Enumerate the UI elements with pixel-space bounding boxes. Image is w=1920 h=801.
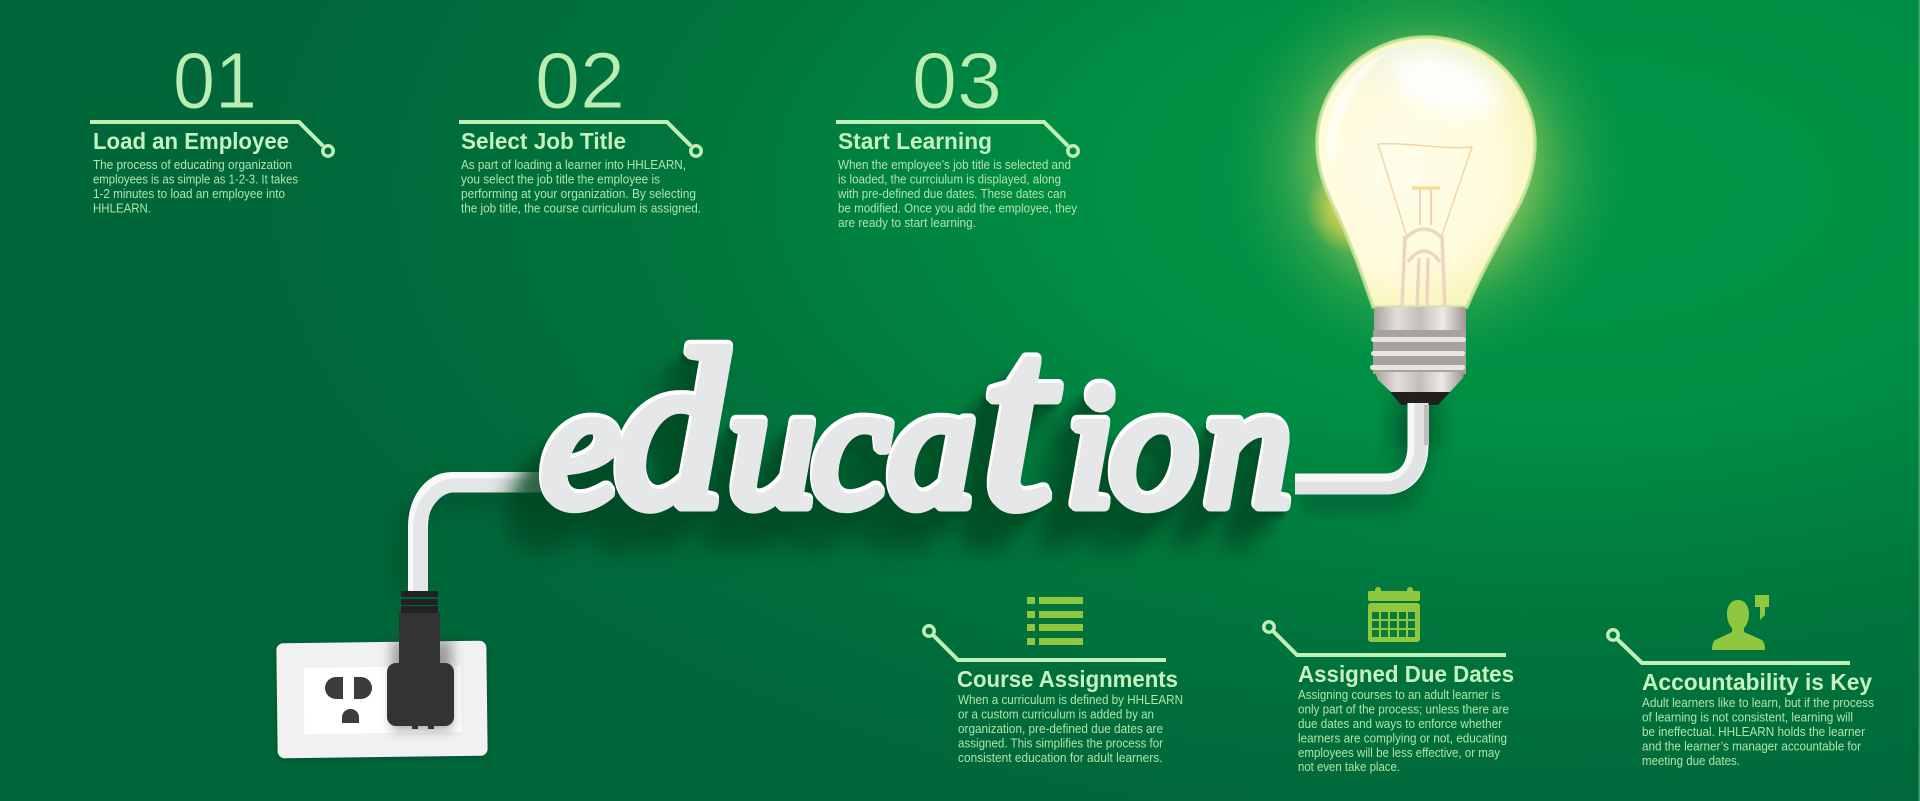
- body text 01: HHLEARN.: [93, 202, 151, 216]
- body text 01: [93, 158, 298, 216]
- number 02: 02: [535, 36, 625, 125]
- body text 02: performing at your organization. By selecting: [461, 187, 696, 201]
- bulb shadow: [1392, 395, 1440, 450]
- icon: list: [1027, 597, 1083, 645]
- heading: select job title: Select Job Title: [461, 128, 626, 154]
- word: education: i: [1066, 347, 1115, 545]
- heading: accountability is key: Accountability is Key: [1642, 669, 1872, 695]
- light bulb: [1221, 0, 1631, 450]
- body text: of learning is not consistent, learning will: [1642, 710, 1853, 724]
- body text: or a custom curriculum is added by an: [958, 708, 1154, 722]
- body text 03: is loaded, the currciulum is displayed, along: [838, 172, 1061, 186]
- word: education: a: [888, 347, 977, 545]
- connector line: [1608, 630, 1850, 663]
- word: education: e: [541, 347, 620, 545]
- filament: [1378, 144, 1472, 307]
- heading: start learning: Start Learning: [838, 128, 992, 154]
- icon: person with key: [1712, 595, 1769, 650]
- body text 03: are ready to start learning.: [838, 216, 976, 230]
- body text 03: [837, 158, 1078, 230]
- body text: learners are complying or not, educating: [1298, 732, 1507, 746]
- body text 01: The process of educating organization: [93, 158, 292, 172]
- body text 03: When the employee’s job title is selected and: [838, 158, 1071, 172]
- word: education: c: [812, 347, 891, 545]
- body text: Assigning courses to an adult learner is: [1298, 688, 1500, 702]
- power cord: [403, 403, 1426, 595]
- number 01: 01: [173, 36, 257, 125]
- connector line 03: [836, 122, 1078, 156]
- icon: calendar: [1368, 587, 1420, 642]
- word: education: d: [614, 305, 728, 555]
- body text: assigned. This simplifies the process for: [958, 736, 1163, 750]
- body text: organization, pre-defined due dates are: [958, 722, 1163, 736]
- word: education: t: [982, 279, 1059, 562]
- bulb glow: [1221, 0, 1631, 370]
- feature: course assignments: [924, 597, 1183, 765]
- bulb glass: [1317, 37, 1535, 307]
- number 03: 03: [912, 36, 1002, 125]
- feature: assigned due dates: [1264, 587, 1514, 774]
- body text 01: 1-2 minutes to load an employee into: [93, 187, 285, 201]
- body text 01: employees is as simple as 1-2-3. It takes: [93, 172, 298, 186]
- body text: Adult learners like to learn, but if the process: [1642, 696, 1874, 710]
- connector line 01: [90, 122, 333, 156]
- step 01: load an employee: [90, 36, 333, 216]
- heading: assigned due dates: Assigned Due Dates: [1298, 661, 1514, 687]
- screw base: [1370, 307, 1466, 405]
- feature: accountability is key: [1608, 595, 1874, 768]
- body text: and the learner’s manager accountable for: [1642, 740, 1861, 754]
- cord left: [418, 482, 560, 592]
- body text 02: [461, 158, 701, 216]
- step 02: select job title: [459, 36, 701, 216]
- body text: meeting due dates.: [1642, 754, 1740, 768]
- body text: not even take place.: [1298, 760, 1400, 774]
- body text: consistent education for adult learners.: [958, 751, 1162, 765]
- heading: course assignments: Course Assignments: [957, 666, 1178, 692]
- word: education: n: [1204, 347, 1293, 545]
- connector line: [1264, 622, 1506, 655]
- wall socket with plug: [276, 591, 488, 759]
- step 03: start learning: [836, 36, 1078, 230]
- body text: employees will be less effective, or may: [1298, 746, 1501, 760]
- cord shadow: [403, 410, 1414, 595]
- body text: When a curriculum is defined by HHLEARN: [958, 693, 1183, 707]
- body text: only part of the process; unless there are: [1298, 702, 1509, 716]
- socket holes: [325, 677, 372, 723]
- body text: [1298, 688, 1509, 774]
- word: education: o: [1110, 347, 1199, 545]
- plug shadow: [392, 640, 452, 730]
- plug neck: [399, 612, 440, 665]
- cord right: [1295, 403, 1426, 488]
- heading: load an employee: Load an Employee: [93, 128, 289, 154]
- body text 03: be modified. Once you add the employee, they: [838, 202, 1078, 216]
- body text 02: you select the job title the employee is: [461, 172, 660, 186]
- socket plate: [276, 641, 488, 759]
- body text: be ineffectual. HHLEARN holds the learner: [1642, 725, 1865, 739]
- word: education: u: [728, 347, 817, 545]
- body text: [1642, 696, 1874, 768]
- body text: due dates and ways to enforce whether: [1298, 717, 1502, 731]
- plug head: [387, 663, 454, 729]
- body text: [958, 693, 1183, 765]
- connector line: [924, 626, 1166, 660]
- plug rings: [401, 591, 438, 613]
- body text 02: As part of loading a learner into HHLEARN,: [461, 158, 686, 172]
- connector line 02: [459, 122, 701, 156]
- glass highlights: [1326, 42, 1506, 165]
- body text 02: the job title, the course curriculum is assigned.: [461, 202, 701, 216]
- body text 03: with pre-defined due dates. These dates can: [837, 187, 1066, 201]
